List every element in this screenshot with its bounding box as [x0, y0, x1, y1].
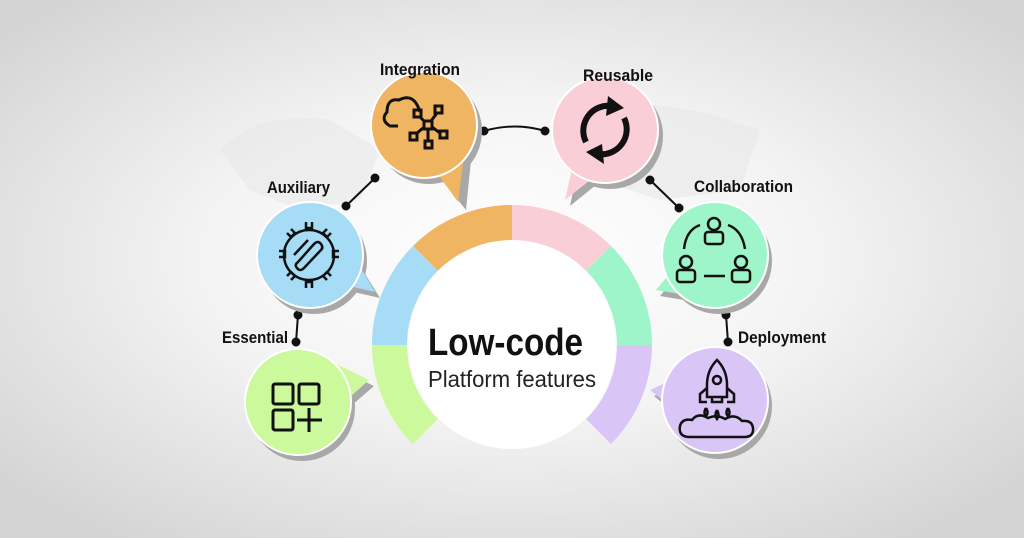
- bubble: Auxiliary: [257, 202, 380, 314]
- ring chart: [372, 205, 652, 449]
- label: Auxiliary: Auxiliary: [267, 178, 330, 197]
- connectors: [292, 126, 732, 346]
- center title: [428, 322, 596, 392]
- center title: Platform features: [428, 366, 596, 392]
- label: Essential: Essential: [222, 328, 288, 347]
- bubble: Collaboration: [656, 202, 772, 314]
- bubble: Essential: [245, 349, 374, 461]
- bubble: Deployment: [650, 347, 772, 459]
- label: Reusable: Reusable: [583, 66, 653, 85]
- bubble: Reusable: [552, 77, 663, 206]
- label: Deployment: Deployment: [738, 328, 826, 347]
- bubble: Integration: [371, 72, 482, 210]
- label: Integration: Integration: [380, 60, 460, 79]
- faint world map backdrop: [220, 103, 760, 380]
- center title: Low-code: [428, 322, 583, 364]
- label: Collaboration: Collaboration: [694, 177, 793, 196]
